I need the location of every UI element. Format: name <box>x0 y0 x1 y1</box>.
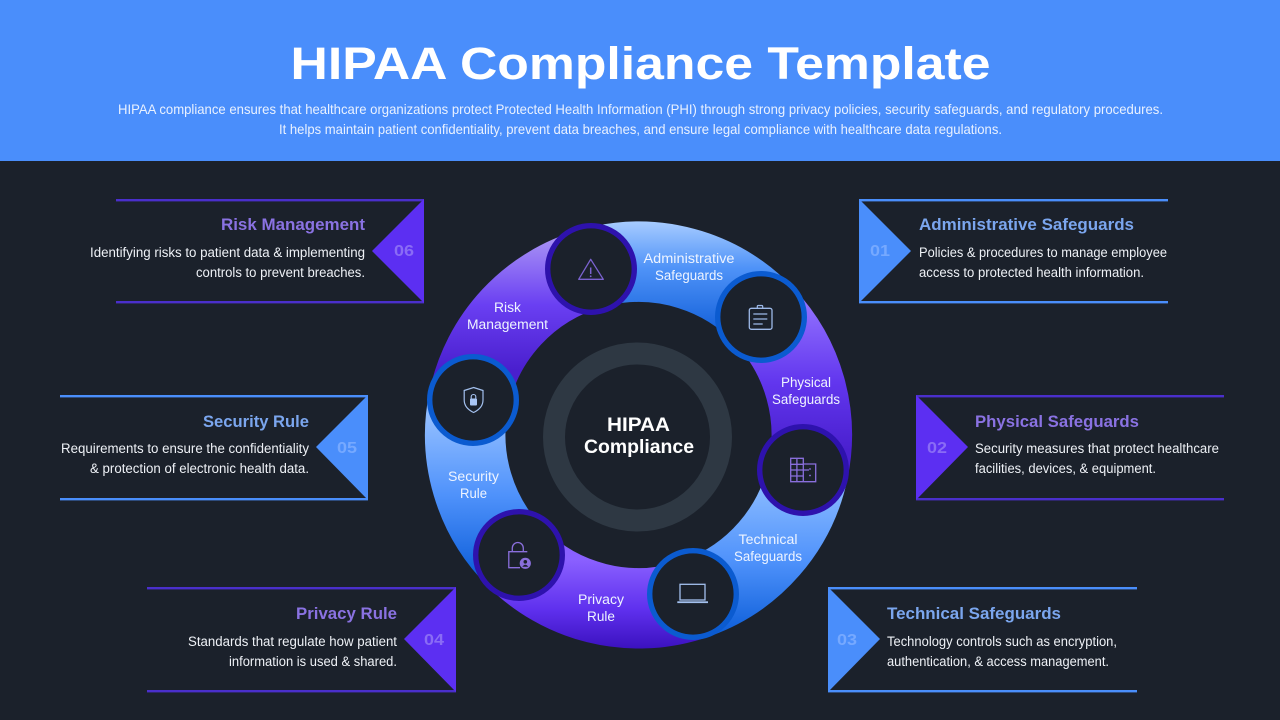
panel: technical safeguards <box>828 587 1137 692</box>
header description: It helps maintain patient confidentiality, prevent data breaches, and ensure legal compliance with healthcare data regulations. <box>279 121 1002 137</box>
panel: administrative safeguards: Administrative Safeguards <box>919 216 1134 234</box>
ring labels: Security <box>448 469 499 484</box>
center hub: HIPAA <box>607 415 670 436</box>
panel: risk management: Identifying risks to patient data & implementing <box>90 245 365 260</box>
ring diagram <box>430 226 846 637</box>
panel: risk management <box>90 199 424 303</box>
header description <box>118 101 1163 137</box>
header description: HIPAA compliance ensures that healthcare organizations protect Protected Health Information (PHI) through strong privacy policies, security safeguards, and regulatory procedures. <box>118 101 1163 117</box>
panel: physical safeguards <box>916 395 1224 500</box>
panel: security rule: Requirements to ensure the confidentiality <box>61 441 309 456</box>
ring labels: Safeguards <box>655 268 723 283</box>
panel: privacy rule: Standards that regulate how patient <box>188 634 397 649</box>
ring labels: Risk <box>494 300 521 315</box>
node: warning icon <box>548 226 634 312</box>
node: clipboard icon <box>718 274 804 360</box>
center hub <box>554 354 721 520</box>
panel: security rule: Security Rule <box>203 413 309 431</box>
node: laptop icon <box>650 551 736 637</box>
panel: privacy rule <box>147 587 456 692</box>
panel: administrative safeguards: 01 <box>870 243 890 260</box>
ring labels <box>448 251 840 624</box>
panel: security rule: 05 <box>337 440 357 457</box>
panel: technical safeguards: Technology controls such as encryption, <box>887 634 1117 649</box>
ring segment: security rule <box>465 399 516 558</box>
panel: technical safeguards: authentication, & access management. <box>887 654 1109 669</box>
center hub: Compliance <box>584 437 694 458</box>
ring segment: administrative safeguards <box>602 262 764 316</box>
ring labels: Safeguards <box>734 549 802 564</box>
panel: security rule <box>60 395 368 500</box>
panel: administrative safeguards <box>859 199 1168 303</box>
header band <box>0 0 1280 161</box>
panel: risk management: controls to prevent breaches. <box>196 265 365 280</box>
panel: technical safeguards: 03 <box>837 632 857 649</box>
panel: risk management: 06 <box>394 243 414 260</box>
ring segment: physical safeguards <box>764 316 812 471</box>
ring labels: Privacy <box>578 592 624 607</box>
panel: physical safeguards: Physical Safeguards <box>975 413 1139 431</box>
ring segment: privacy rule <box>516 558 689 608</box>
ring labels: Safeguards <box>772 392 840 407</box>
panel: privacy rule: Privacy Rule <box>296 605 397 623</box>
panel: security rule: & protection of electronic health data. <box>90 461 309 476</box>
node: building icon <box>760 427 846 513</box>
panel: administrative safeguards: access to protected health information. <box>919 265 1144 280</box>
panel: physical safeguards: facilities, devices, & equipment. <box>975 461 1156 476</box>
ring labels: Management <box>467 317 548 332</box>
panel: privacy rule: 04 <box>424 632 444 649</box>
node: shield icon <box>430 357 516 443</box>
node: lock with person icon <box>476 512 562 598</box>
title: HIPAA Compliance Template <box>290 38 990 89</box>
panel: administrative safeguards: Policies & procedures to manage employee <box>919 245 1167 260</box>
panel: privacy rule: information is used & shared. <box>229 654 397 669</box>
ring segment: risk management <box>469 268 591 399</box>
ring labels: Technical <box>738 532 798 547</box>
panel: physical safeguards: 02 <box>927 440 947 457</box>
ring segment: technical safeguards <box>698 471 808 598</box>
ring labels: Rule <box>460 486 487 501</box>
panel: physical safeguards: Security measures that protect healthcare <box>975 441 1219 456</box>
ring labels: Administrative <box>644 251 734 266</box>
ring labels: Physical <box>781 375 831 390</box>
panel: technical safeguards: Technical Safeguards <box>887 605 1061 623</box>
ring labels: Rule <box>587 609 615 624</box>
panel: risk management: Risk Management <box>221 216 366 234</box>
